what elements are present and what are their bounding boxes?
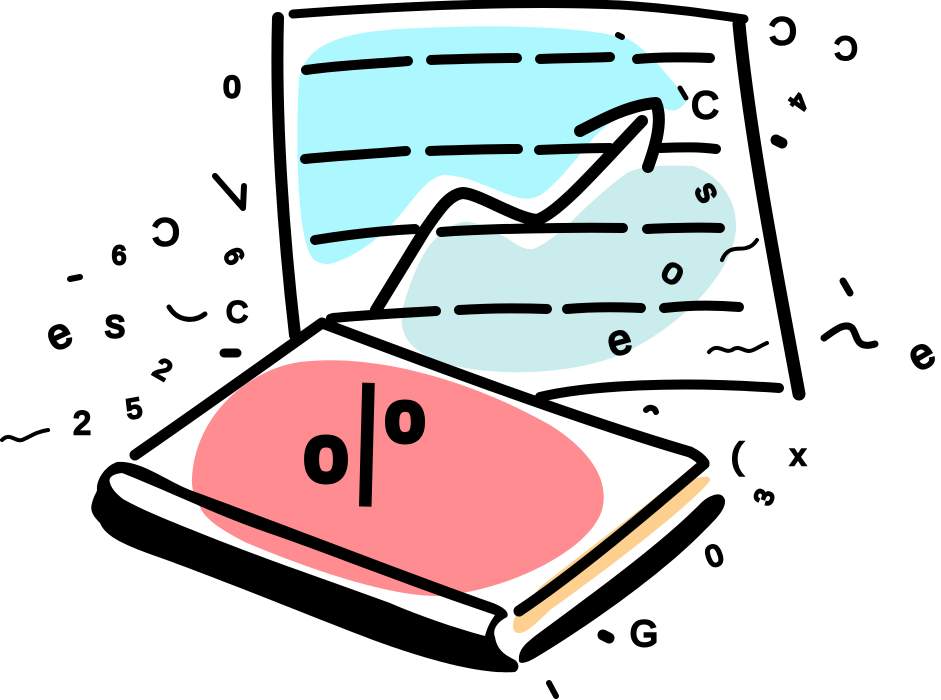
rising arrow [376,103,659,310]
scattered characters: 3 [747,485,781,509]
scattered characters: C [152,210,180,252]
scattered characters: 6 [112,240,126,270]
scattered characters: C [769,9,797,51]
scattered characters: ( [731,435,743,476]
scattered characters: 4 [783,87,815,117]
scattered characters: x [790,439,806,472]
book page wash: red [192,360,604,596]
chart rows of dashes [305,57,739,318]
scattered characters: s [687,175,728,209]
scattered characters: 2 [148,352,177,387]
scattered characters: C [226,296,248,329]
scattered characters: C [834,30,858,66]
book spine [91,462,518,672]
scattered characters: C [691,85,719,127]
percent left circle: o [305,412,347,497]
arrow head [580,103,659,167]
scattered characters: e [38,308,79,360]
scattered characters: 2 [73,405,91,441]
scattered characters: 5 [124,392,144,425]
scattered characters: o [655,248,693,294]
arrow line [376,121,642,310]
scattered characters: 6 [217,242,251,270]
book page edge: orange [513,477,710,633]
scattered characters: e [602,314,636,365]
scattered characters: 0 [701,538,728,575]
percent bar: | [348,360,386,506]
chart sheet outline [277,4,799,397]
percent sign [305,360,424,506]
chart colour wash: teal [402,166,736,372]
panel: chart sheet [277,4,799,397]
book back cover edge [519,494,725,663]
scattered characters: s [105,302,125,346]
book cover outline [135,315,704,611]
chart colour wash: cyan [297,26,687,264]
panel: book [91,315,725,672]
scattered characters: G [630,613,658,654]
scattered characters: 0 [224,71,240,104]
percent right circle: o [386,379,424,455]
